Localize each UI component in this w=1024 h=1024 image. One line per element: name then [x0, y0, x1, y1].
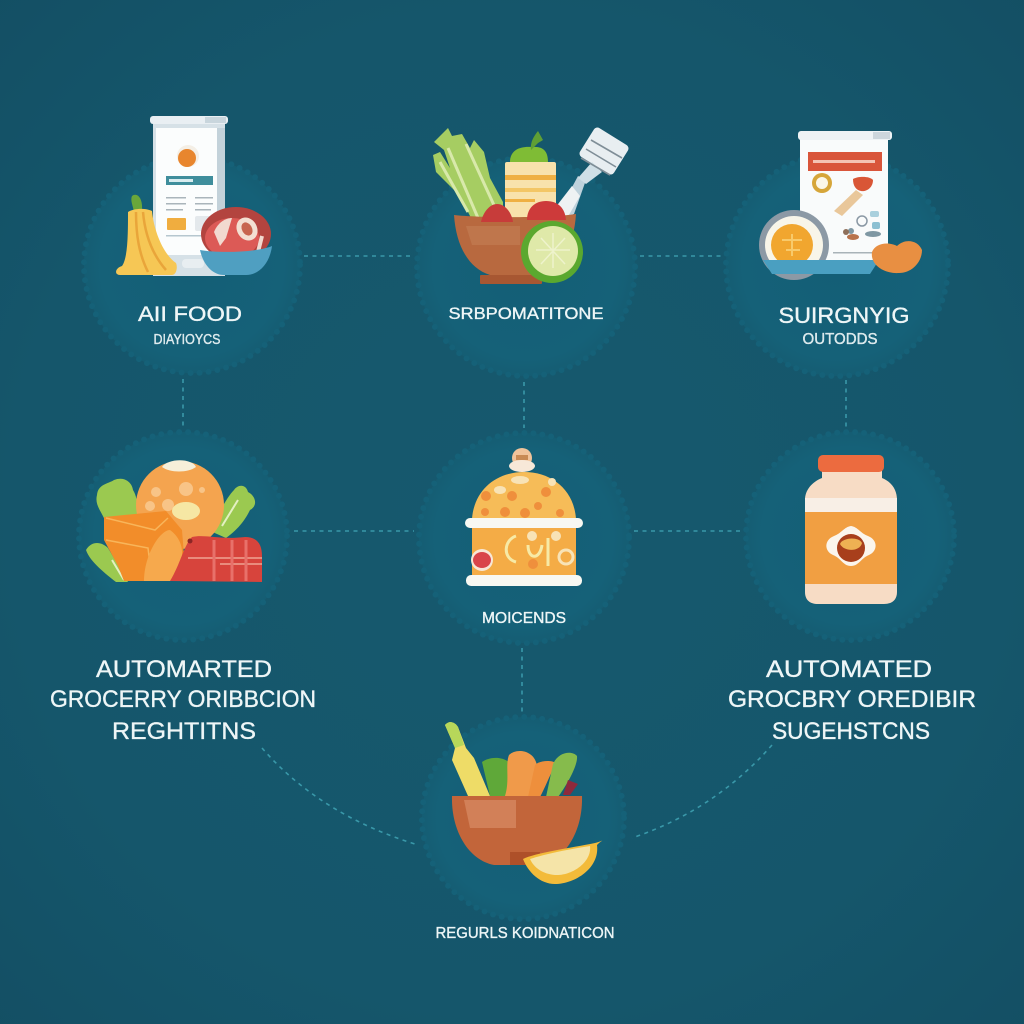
icon: tomatoes: [481, 201, 566, 222]
icon: celery: [433, 128, 503, 222]
heading: moicends: MOICENDS: [482, 610, 566, 627]
icon: orange ball with cap: [136, 460, 224, 549]
panel: fresh produce: [79, 432, 287, 640]
left caption: automarted grocery: REGHTITNS: [112, 718, 256, 745]
panel: jar: [746, 432, 954, 640]
heading: surgnyig: SUIRGNYIG: [778, 303, 910, 328]
panel: surgnyig outdoods: [726, 131, 948, 376]
icon: vegetables in bowl: [445, 722, 578, 797]
icon: pot body: [471, 527, 576, 575]
panel: AI food dynamics: [84, 116, 300, 373]
icon: document with illustrations: [798, 131, 892, 263]
icon: bowl of meat: [200, 207, 272, 275]
icon: green apple top: [510, 131, 548, 162]
left caption: automarted grocery: AUTOMARTED: [96, 656, 272, 683]
icon: cucumber slice: [521, 221, 583, 283]
right caption: automated grocery: SUGEHSTCNS: [772, 718, 930, 745]
icon: wooden bowl: [454, 214, 576, 284]
icon: dome with food: [472, 472, 576, 519]
dashed connector network: [183, 256, 846, 845]
icon: terracotta bowl: [452, 796, 582, 865]
icon: layered block: [505, 162, 556, 222]
heading: AI food: AII FOOD: [138, 303, 242, 326]
subheading: outdoods: OUTODDS: [802, 331, 878, 348]
panel: salad and utensil: [417, 126, 635, 376]
icon: lettuce leaves: [86, 479, 255, 582]
right caption: automated grocery: GROCBRY OREDIBIR: [728, 686, 976, 713]
panel: covered dish: [419, 433, 629, 643]
panel: bowl and lemon: [422, 717, 624, 942]
left caption: automarted grocery: GROCERRY ORIBBCION: [50, 686, 316, 713]
right caption: automated grocery: AUTOMATED: [766, 656, 932, 683]
icon: orange-lidded jar: [805, 455, 897, 604]
icon: lemon wedge: [523, 840, 603, 884]
right caption: automated grocery: [728, 656, 976, 745]
icon: red meat: [170, 536, 262, 582]
heading: bowl panel: REGURLS KOIDNATICON: [436, 925, 614, 942]
icon: orange wedge: [104, 511, 186, 581]
icon: orange bread: [872, 241, 922, 273]
icon: phone with food app: [150, 116, 228, 276]
icon: pot rims: [465, 518, 583, 586]
icon: dome knob: [509, 448, 535, 472]
icon: spatula: [555, 126, 630, 220]
left caption: automarted grocery: [50, 656, 316, 745]
heading: salad panel: SRBPOMATITONE: [448, 304, 604, 323]
icon: tray: [763, 260, 879, 274]
subheading: dynamics: DIAYIOYCS: [154, 332, 220, 348]
icon: banana: [116, 195, 177, 275]
icon: plate of food: [759, 210, 829, 280]
